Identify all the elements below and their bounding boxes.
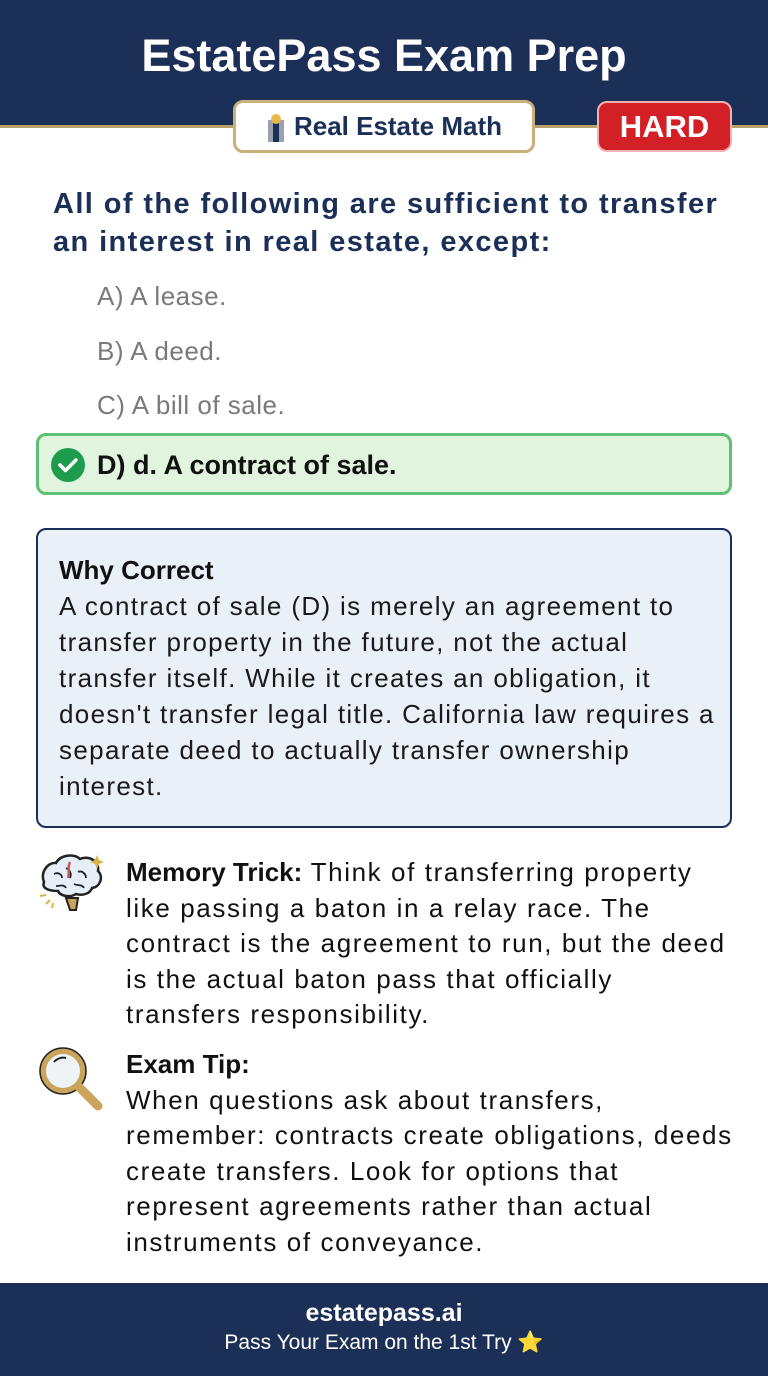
footer site: estatepass.ai [305,1299,463,1327]
icon: building [268,114,284,142]
exam tip: remember: contracts create obligations, deeds [126,1120,733,1150]
heading: Why Correct [59,555,214,585]
exam tip: represent agreements rather than actual [126,1191,652,1221]
explanation: A contract of sale (D) is merely an agreement to [59,591,674,621]
option A: A) A lease. [97,281,227,311]
correct answer [36,433,732,495]
memory trick: contract is the agreement to run, but the deed [126,928,726,958]
exam tip: Exam Tip: [126,1049,250,1079]
explanation [59,591,715,801]
explanation: interest. [59,771,164,801]
question: All of the following are sufficient to transfer [53,188,718,220]
exam tip: create transfers. Look for options that [126,1156,619,1186]
option B: B) A deed. [97,336,222,366]
exam tip: instruments of conveyance. [126,1226,484,1256]
icon: brain [40,854,104,911]
memory trick: is the actual baton pass that officially [126,964,613,994]
question [53,188,718,258]
footer [0,1283,768,1376]
memory trick: transfers responsibility. [126,999,430,1029]
memory trick: Memory Trick: Think of transferring property [126,857,692,887]
option C: C) A bill of sale. [97,390,285,420]
explanation: separate deed to actually transfer ownership [59,735,630,765]
badge: topic: Real Estate Math [294,111,502,141]
footer tagline: Pass Your Exam on the 1st Try ⭐ [224,1331,544,1354]
explanation: transfer itself. While it creates an obligation, it [59,663,651,693]
icon: check [51,448,85,482]
icon: magnifier [39,1047,102,1110]
badge: difficulty [597,101,732,152]
options [97,281,285,420]
memory trick [126,857,726,1029]
answer text: D) d. A contract of sale. [97,450,397,480]
badge: topic [233,100,535,153]
exam tip [126,1049,733,1256]
badge: difficulty: HARD [620,109,709,144]
explanation: doesn't transfer legal title. California law requires a [59,699,715,729]
header [0,0,768,128]
explanation: transfer property in the future, not the actual [59,627,628,657]
title: EstatePass Exam Prep [141,30,627,81]
panel: why correct [36,528,732,828]
question: an interest in real estate, except: [53,226,552,258]
exam tip: When questions ask about transfers, [126,1084,604,1114]
memory trick: like passing a baton in a relay race. The [126,892,651,922]
